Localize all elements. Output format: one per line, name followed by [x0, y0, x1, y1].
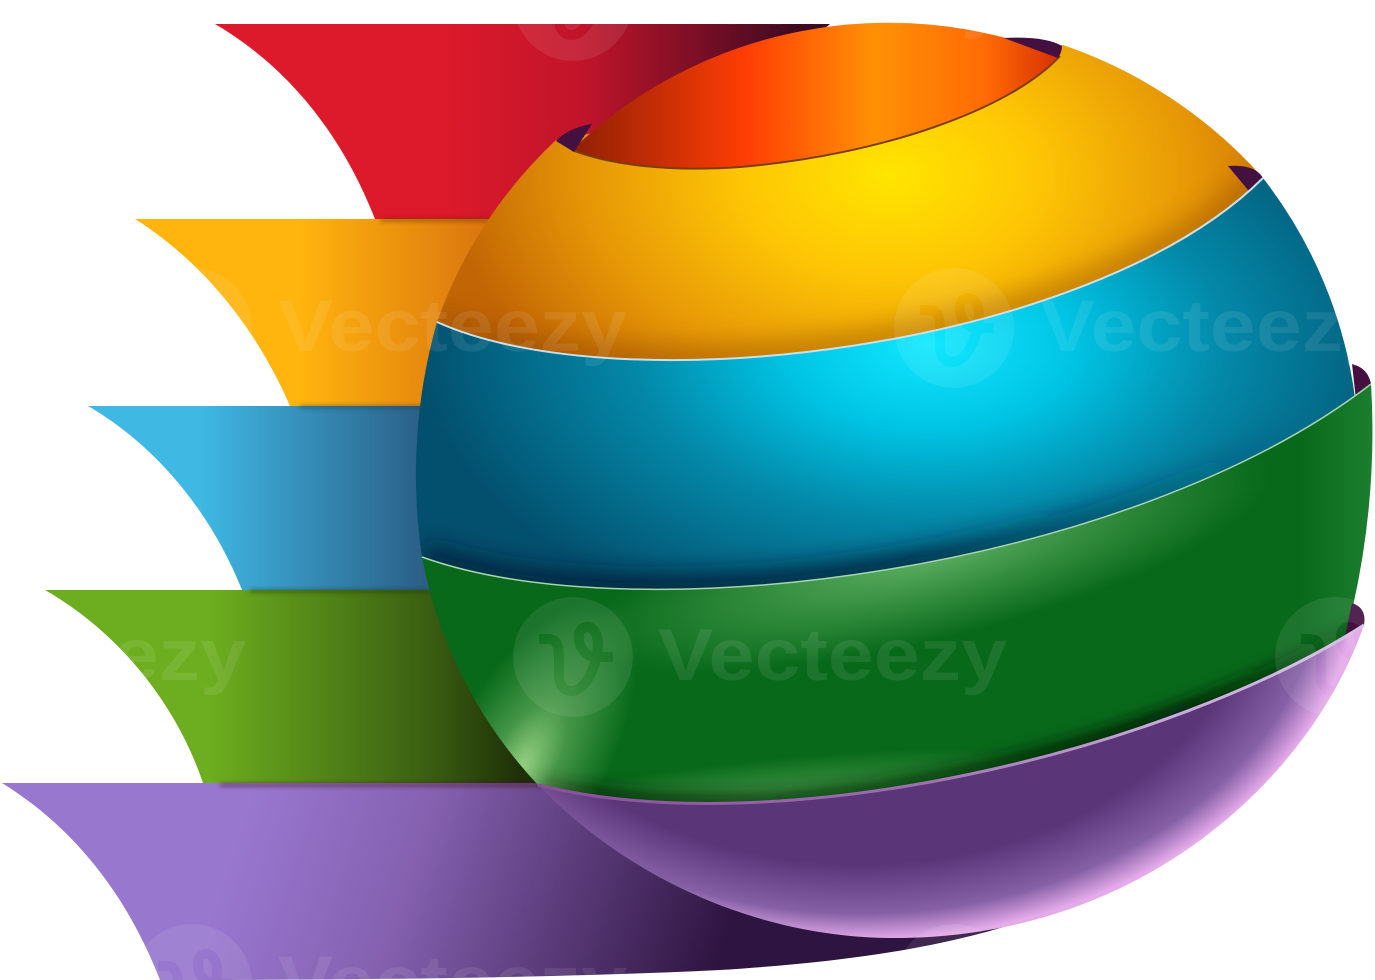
- ribbon: blue: [88, 406, 430, 590]
- watermark text: Vecteezy: [658, 615, 1007, 696]
- ribbon: yellow: [135, 219, 500, 406]
- band: purple bowl: [538, 625, 1364, 938]
- cap rim: [572, 56, 1060, 169]
- ribbon edge shadows: [220, 220, 545, 785]
- watermark text: Vecteezy: [1040, 286, 1375, 367]
- band: green: [420, 380, 1375, 826]
- band rims: [422, 178, 1371, 803]
- sphere: [416, 23, 1375, 938]
- ribbon: green: [45, 590, 560, 783]
- band: blue: [416, 178, 1355, 589]
- band: orange cap: [572, 23, 1060, 169]
- ribbon: purple: [2, 783, 1150, 980]
- sliver: lower right: [1340, 603, 1364, 660]
- watermark text: Vecteezy: [278, 286, 627, 367]
- band: yellow: [437, 45, 1263, 360]
- ribbon: red: [215, 24, 830, 219]
- inner slivers: [556, 38, 1371, 400]
